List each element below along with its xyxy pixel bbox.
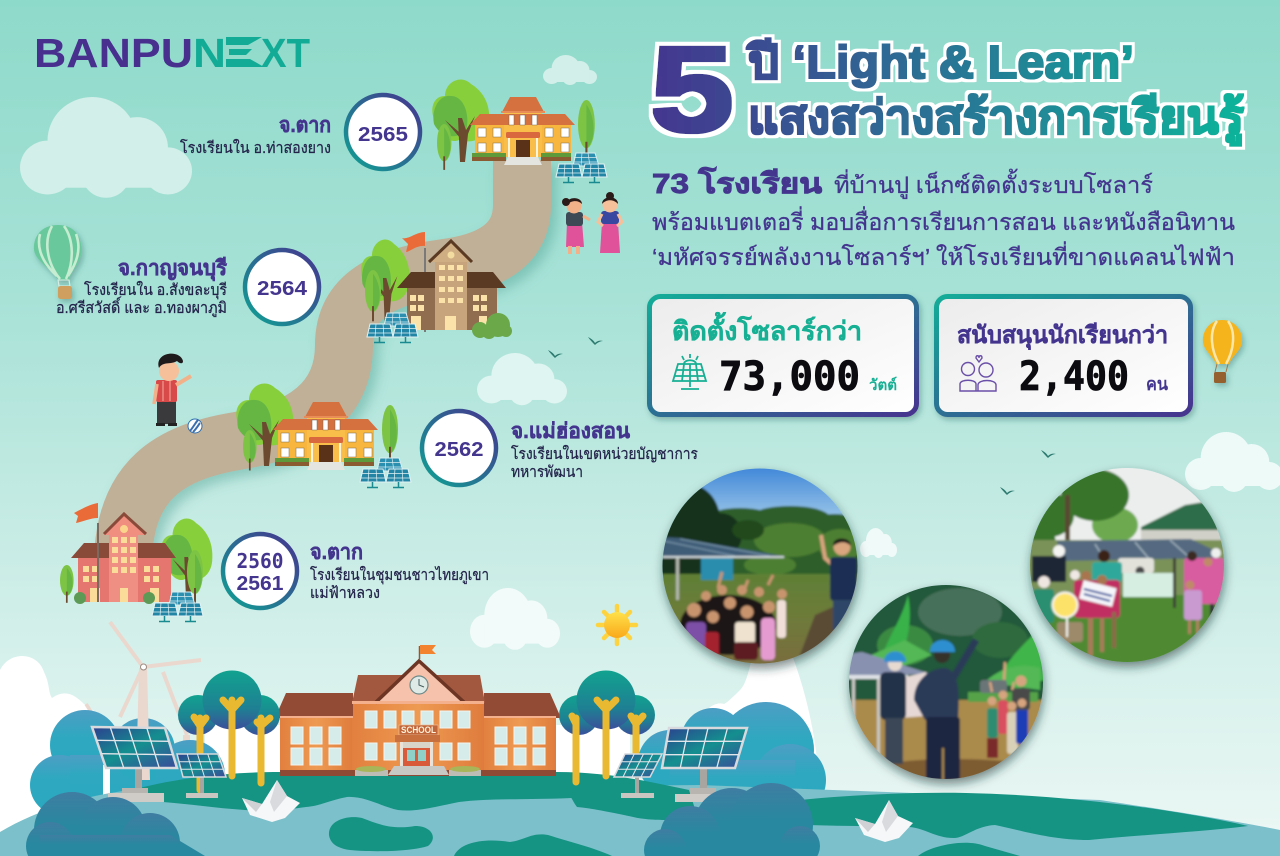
year badge 2560 2561: 2560 <box>236 549 284 573</box>
icon: yellow school <box>273 402 378 470</box>
icon: yellow school <box>470 97 575 165</box>
icon: flag <box>402 232 426 332</box>
heading: สนับสนุนนักเรียนกว่า <box>957 322 1168 351</box>
green blobs in water <box>329 817 433 851</box>
value: 2,400 <box>1019 354 1129 400</box>
icon: green balloon <box>34 225 82 299</box>
clouds <box>20 55 1280 650</box>
icon: yellow balloon <box>1203 320 1242 383</box>
text: Tak 2565: โรงเรียนใน อ.ท่าสองยาง <box>180 139 331 157</box>
icon: two girls in traditional dress <box>562 192 622 254</box>
icon: sun <box>598 606 636 644</box>
year badge 2562: 2562 <box>434 438 484 461</box>
icon: red school <box>71 514 176 604</box>
text: Kanchanaburi 2564: จ.กาญจนบุรี <box>118 256 228 282</box>
green island: right <box>800 793 1248 840</box>
text: Mae Hong Son 2562: โรงเรียนในเขตหน่วยบัญชาการ <box>511 445 698 463</box>
white backing behind trees <box>205 725 630 775</box>
water <box>0 785 1280 856</box>
windmills <box>86 672 190 780</box>
paper boats <box>242 780 913 842</box>
photo: technicians and children by solar roof <box>845 582 1050 785</box>
value: 73,000 <box>719 354 860 400</box>
text: Mae Hong Son 2562: ทหารพัฒนา <box>511 464 583 481</box>
heading: ติดตั้งโซลาร์กว่า <box>672 311 862 346</box>
intro paragraph: พร้อมแบตเตอรี่ มอบสื่อการเรียนการสอน และหนังสือนิทาน <box>652 206 1235 235</box>
white cloud: left <box>0 656 120 840</box>
school 2565 <box>432 80 607 182</box>
title: ปี ‘Light & Learn’ <box>746 36 1134 88</box>
icon: solar panels <box>360 458 411 488</box>
stat card: solar <box>650 296 916 414</box>
logo: Banpu Next: N <box>193 30 226 76</box>
icon: solar panels <box>367 313 418 342</box>
logo: Banpu Next: XT <box>261 30 310 76</box>
icon: tree <box>60 519 212 604</box>
trees: left <box>178 670 280 790</box>
white cloud: right <box>690 650 818 790</box>
unit: วัตต์ <box>869 376 897 394</box>
photo: children with signs by solar roof <box>1026 465 1228 667</box>
year badge 2565 <box>346 95 420 169</box>
year badge 2565: 2565 <box>358 123 408 146</box>
text: Tak 2560-2561 <box>310 541 489 602</box>
text: Tak 2560-2561: จ.ตาก <box>310 541 363 564</box>
bottom landscape <box>0 622 1280 856</box>
dark cloud: right <box>644 783 820 856</box>
intro paragraph: ‘มหัศจรรย์พลังงานโซลาร์ฯ’ ให้โรงเรียนที่ขาดแคลนไฟฟ้า <box>652 241 1235 270</box>
dark cloud: left <box>26 792 205 856</box>
icon: trees <box>236 384 398 470</box>
unit: คน <box>1146 374 1169 394</box>
windmill: front <box>103 622 201 803</box>
icon: two students <box>960 356 996 391</box>
intro paragraph: 73 โรงเรียน <box>652 166 822 199</box>
text: Mae Hong Son 2562 <box>511 420 698 481</box>
icon: bushes <box>472 313 512 339</box>
logo: Banpu Next <box>34 30 310 76</box>
year badge 2560 2561: 2561 <box>236 572 284 595</box>
logo: Banpu Next: BANPU <box>34 30 193 76</box>
stat card: students <box>936 296 1190 414</box>
year badge 2564: 2564 <box>257 277 308 300</box>
icon: tree <box>361 240 410 322</box>
year badge 2560 2561 <box>223 534 297 608</box>
title: 5 <box>650 21 734 157</box>
icon: solar panels <box>556 153 607 182</box>
photo: children and man waving by solar roof <box>650 465 865 670</box>
trees: right <box>559 670 655 782</box>
icon: boy with ball <box>154 354 202 433</box>
text: Kanchanaburi 2564 <box>56 256 228 318</box>
birds <box>548 337 1056 495</box>
text: Tak 2565 <box>180 114 331 157</box>
text: Tak 2560-2561: โรงเรียนในชุมชนชาวไทยภูเขา <box>310 566 489 585</box>
year badge 2562 <box>422 411 496 485</box>
school sign text: SCHOOL <box>401 725 436 735</box>
road <box>123 160 522 560</box>
text: Kanchanaburi 2564: โรงเรียนใน อ.สังขละบุรี <box>84 281 227 300</box>
icon: solar panels <box>152 592 203 622</box>
icon: trees <box>432 80 595 170</box>
text: Tak 2560-2561: แม่ฟ้าหลวง <box>310 585 380 602</box>
title: แสงสว่างสร้างการเรียนรู้ <box>748 91 1244 146</box>
title <box>650 21 1244 157</box>
school 2560-2561 <box>60 503 212 622</box>
icon: flag <box>74 503 99 602</box>
icon: brown school <box>397 241 506 330</box>
blue clouds: left <box>30 710 225 815</box>
text: Tak 2565: จ.ตาก <box>279 114 331 137</box>
text: Kanchanaburi 2564: อ.ศรีสวัสดิ์ และ อ.ทองผาภูมิ <box>56 296 227 318</box>
icon: solar panel <box>673 354 706 389</box>
text: Mae Hong Son 2562: จ.แม่ฮ่องสอน <box>511 420 631 443</box>
school 2564 <box>361 232 512 342</box>
solar panels <box>92 727 747 802</box>
intro paragraph <box>652 166 1235 270</box>
school 2562 <box>236 384 411 488</box>
school <box>275 645 561 776</box>
year badge 2564 <box>245 250 319 324</box>
blue clouds: right <box>638 702 826 816</box>
intro paragraph: ที่บ้านปู เน็กซ์ติดตั้งระบบโซลาร์ <box>834 169 1153 199</box>
green island: left <box>122 772 700 825</box>
